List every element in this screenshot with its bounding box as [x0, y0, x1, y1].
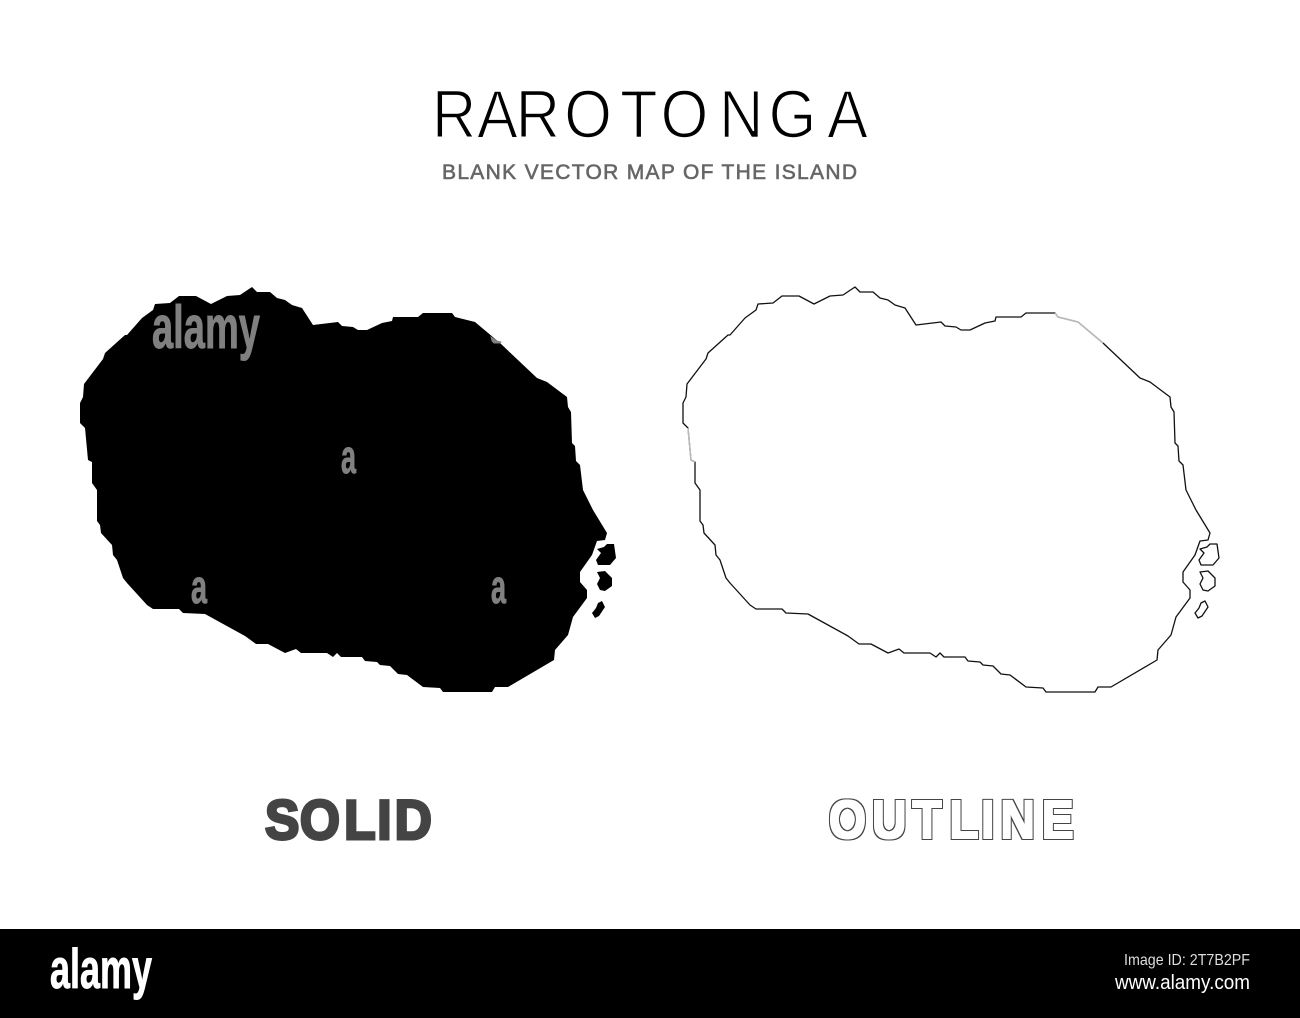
watermark fragment on coast [491, 337, 501, 343]
image id: Image ID: 2T7B2PF [1124, 952, 1250, 969]
footer bar [0, 929, 1300, 1018]
islet 1, solid [596, 544, 616, 565]
islet 3, solid [592, 601, 605, 618]
title: RAROTONGA [432, 75, 869, 152]
islet 2, solid [597, 571, 612, 591]
main island, outline [683, 287, 1210, 692]
watermark wordmark: alamy [152, 294, 260, 361]
islet 2, outline [1200, 571, 1215, 591]
solid map [80, 287, 616, 692]
watermark on solid map [152, 294, 506, 613]
main island, solid [80, 287, 607, 692]
subtitle: BLANK VECTOR MAP OF THE ISLAND [442, 161, 857, 184]
solid label: SOLID [265, 789, 432, 851]
watermark fade on outline [688, 313, 1103, 462]
outline label: OUTLINE [829, 789, 1074, 850]
website: www.alamy.com [1114, 972, 1250, 994]
islet 1, outline [1199, 544, 1219, 565]
footer logo: alamy [50, 937, 152, 1000]
islet 3, outline [1195, 601, 1208, 618]
watermark letter centre: a [341, 430, 356, 483]
outline map [683, 287, 1219, 692]
watermark letter lower left: a [191, 560, 208, 613]
watermark letter lower right: a [491, 560, 506, 613]
